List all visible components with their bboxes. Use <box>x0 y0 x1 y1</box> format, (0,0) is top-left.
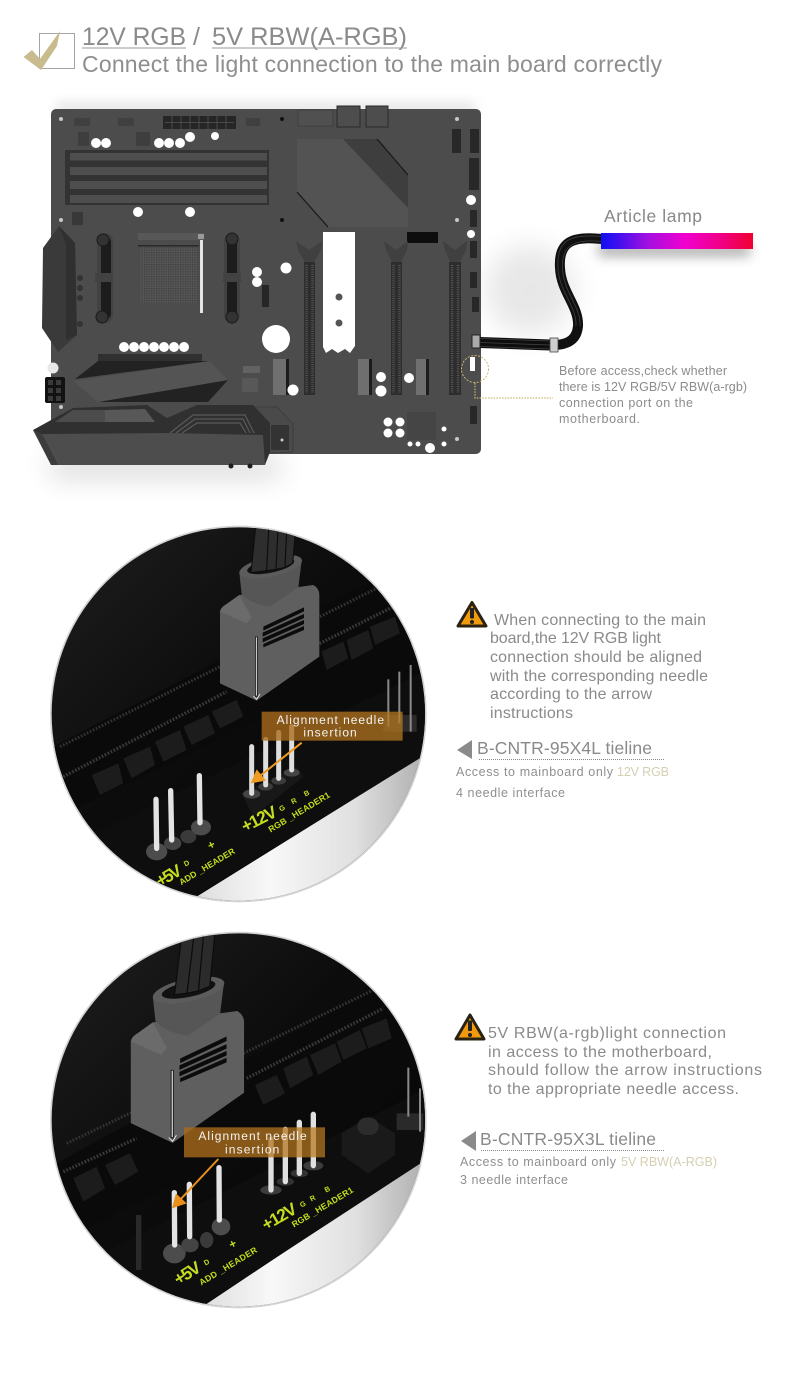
lower heatsink <box>73 354 228 402</box>
text block: board,the 12V RGB light <box>490 630 662 647</box>
tieline description 4-pin: 4 needle interface <box>456 786 565 800</box>
soft shadows <box>50 458 280 476</box>
text block: in access to the motherboard, <box>488 1044 712 1061</box>
silkscreen labels: ADD _HEADER <box>197 1244 260 1287</box>
board <box>51 109 481 454</box>
PCIe slot band <box>54 582 412 808</box>
title: 12V RGB <box>82 23 186 51</box>
silkscreen labels: D <box>202 1257 211 1267</box>
callout: alignment needle insertion: Alignment needle <box>198 1129 307 1143</box>
text block: with the corresponding needle <box>489 668 708 685</box>
tieline description 3-pin: Access to mainboard only <box>460 1155 617 1169</box>
IO cover bottom <box>33 405 293 468</box>
collar <box>153 983 224 1036</box>
tieline description 3-pin <box>460 1155 717 1187</box>
panel: 5V connector photo circle <box>50 932 427 1308</box>
article lamp with cable <box>472 233 753 352</box>
header pins 5V <box>163 1168 230 1263</box>
memory slots <box>65 150 269 205</box>
vertical dark post <box>136 1215 141 1270</box>
title: / <box>193 23 200 51</box>
M.2 shield <box>323 232 355 353</box>
silkscreen labels: +12V <box>238 801 280 836</box>
callout: alignment needle insertion: insertion <box>303 726 357 740</box>
icon: check mark in box <box>24 31 74 70</box>
text block: 5V RBW(a-rgb)light connection <box>488 1025 726 1042</box>
board surface edge <box>106 1090 425 1304</box>
floor below board <box>198 758 420 901</box>
cable <box>556 238 602 345</box>
text block <box>489 612 708 722</box>
VRM heatsink top <box>297 139 408 227</box>
silkscreen labels: +5V <box>170 1257 205 1289</box>
warning note 5V <box>456 1015 762 1098</box>
tieline heading 3-pin: B-CNTR-95X3L tieline <box>480 1129 656 1149</box>
silkscreen labels: B <box>302 788 311 798</box>
note: check connection port: there is 12V RGB/5V RBW(a-rgb) <box>559 380 747 394</box>
silkscreen labels: RGB _HEADER1 <box>267 790 332 834</box>
CPU socket <box>138 233 204 313</box>
silkscreen labels: + <box>205 837 218 853</box>
text block: connection should be aligned <box>490 649 702 666</box>
silkscreen labels <box>157 790 330 886</box>
right header pins <box>387 665 416 732</box>
callout: alignment needle insertion <box>262 712 403 741</box>
mounting screws <box>59 117 459 441</box>
note: check connection port: Before access,check whether <box>559 364 727 378</box>
port highlight circle <box>462 356 488 382</box>
silkscreen labels: +12V <box>258 1198 301 1234</box>
tieline description 4-pin <box>456 765 669 800</box>
icon: warning triangle <box>458 602 486 626</box>
panel: 12V connector photo circle <box>40 517 440 910</box>
leader line <box>475 383 553 398</box>
title <box>82 23 407 51</box>
right edge connectors <box>452 129 479 424</box>
title: 5V RBW(A-RGB) <box>212 23 407 51</box>
floor below board <box>206 1162 420 1307</box>
icon: warning triangle <box>456 1015 484 1039</box>
right header pins <box>397 1068 423 1132</box>
arrow <box>172 1159 218 1208</box>
text block: to the appropriate needle access. <box>488 1081 739 1098</box>
PCIe slots <box>296 241 467 395</box>
white holes <box>48 132 476 453</box>
text block: should follow the arrow instructions <box>488 1062 762 1079</box>
alignment notch <box>253 637 260 699</box>
silkscreen labels: RGB _HEADER1 <box>290 1185 355 1229</box>
header pins 12V <box>243 727 300 799</box>
left heatsink <box>42 226 83 352</box>
cables <box>251 528 296 572</box>
label: article lamp: Article lamp <box>604 206 702 226</box>
callout: alignment needle insertion <box>184 1127 325 1157</box>
cables <box>175 934 216 994</box>
silkscreen labels <box>170 1184 355 1289</box>
alignment notch <box>169 1070 176 1141</box>
small header blocks <box>242 285 436 440</box>
board surface edge <box>94 673 425 896</box>
tieline description 3-pin: 3 needle interface <box>460 1173 568 1187</box>
CPU cooler brackets <box>95 233 241 323</box>
note: check connection port: motherboard. <box>559 412 640 426</box>
silkscreen labels: B <box>323 1184 332 1194</box>
tieline description 3-pin: 5V RBW(A-RGB) <box>621 1155 717 1169</box>
tieline heading 4-pin: B-CNTR-95X4L tieline <box>477 738 652 758</box>
arrow <box>251 743 302 783</box>
callout: alignment needle insertion: insertion <box>225 1142 279 1156</box>
connector housing with cables <box>220 517 319 701</box>
motherboard illustration <box>33 103 575 476</box>
silkscreen labels: +5V <box>152 860 185 891</box>
housing body <box>131 1011 244 1143</box>
lamp bar <box>601 233 753 249</box>
note: check connection port <box>559 364 747 426</box>
tieline description 4-pin: Access to mainboard only <box>456 765 614 779</box>
callout: alignment needle insertion: Alignment needle <box>277 713 384 727</box>
silkscreen labels: R <box>308 1193 318 1203</box>
connector housing with cables <box>131 918 244 1143</box>
PCIe slot band <box>56 989 416 1228</box>
header pins 5V <box>146 776 211 860</box>
text block: instructions <box>490 705 573 722</box>
vent slots <box>263 607 304 647</box>
text block <box>488 1025 762 1098</box>
rear IO ports <box>298 106 388 127</box>
housing body <box>220 585 319 701</box>
text block: according to the arrow <box>490 686 652 703</box>
lamp glow shadow <box>598 244 750 256</box>
vent slots <box>179 1036 227 1082</box>
tactile button <box>342 1117 395 1173</box>
connector plugs <box>550 338 558 352</box>
silkscreen labels: G <box>277 803 287 813</box>
silkscreen labels: D <box>182 858 191 868</box>
header pins 12V <box>260 1114 323 1195</box>
silkscreen labels: + <box>226 1236 239 1252</box>
subtitle: Connect the light connection to the main board correctly <box>82 51 662 77</box>
note: check connection port: connection port on the <box>559 396 693 410</box>
warning note 12V <box>458 602 708 722</box>
text block: When connecting to the main <box>494 612 706 629</box>
top connectors <box>72 116 260 225</box>
collar <box>239 561 302 607</box>
silkscreen labels: R <box>289 795 299 806</box>
silkscreen labels: G <box>298 1199 308 1209</box>
chip <box>407 232 438 243</box>
tieline description 4-pin: 12V RGB <box>617 765 669 779</box>
silkscreen labels: ADD _HEADER <box>177 845 237 887</box>
power connector <box>45 377 65 403</box>
pin header base 12V <box>242 767 303 817</box>
